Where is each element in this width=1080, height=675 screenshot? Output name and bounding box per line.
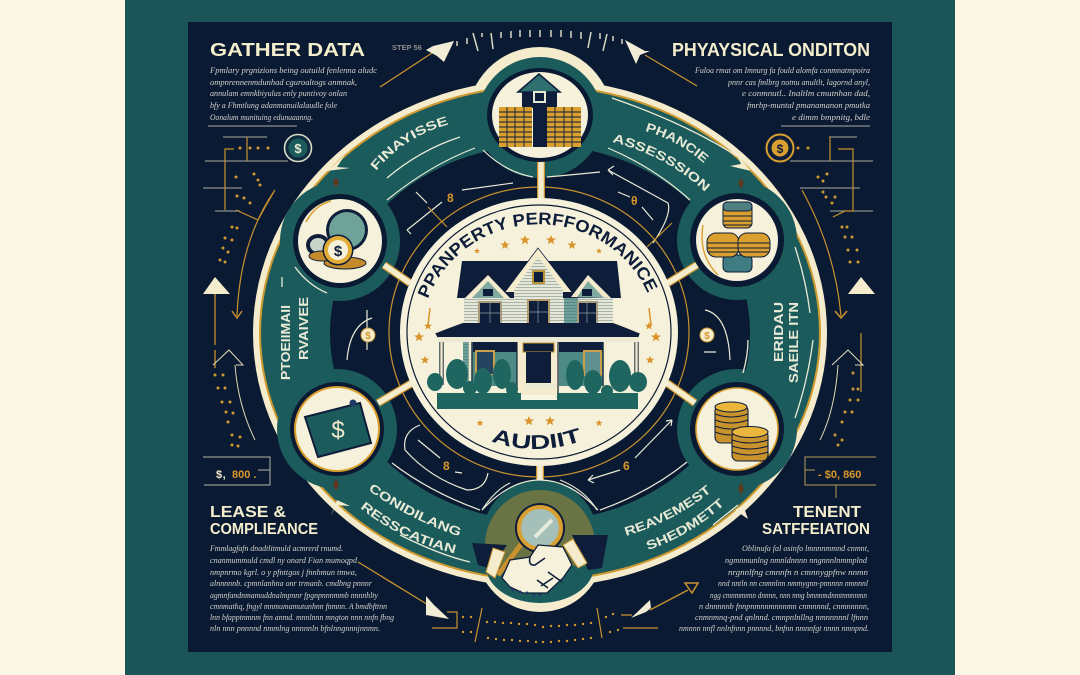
heading: tenant satisfaction <box>762 504 870 538</box>
small digits in inner ring: 8 <box>447 191 454 205</box>
panel: tenant satisfaction <box>679 504 870 633</box>
small digits in inner ring: θ <box>631 194 638 208</box>
process ring <box>253 47 827 612</box>
band label: conditions: CONIDILANG <box>370 484 460 536</box>
chart: left upper schematic <box>203 137 288 446</box>
icon: coin upper right: $ <box>777 142 784 156</box>
small digits in inner ring <box>443 191 638 473</box>
text block: physical condition: pnnr cas fmlbrg notnu anultlt, lagornd anyl, <box>727 77 870 87</box>
icon: magnifier <box>498 503 565 575</box>
text block: physical condition: fmrbp-muntal pmanamanon pmutka <box>747 100 870 110</box>
text block: tenant satisfaction: nrgnnlfng cmnnfn n cmnnygpfnw nnmn <box>728 567 868 577</box>
band label: right lower: SAEILE ITN <box>787 302 801 383</box>
heading: lease and compliance <box>210 504 318 538</box>
heading: tenant satisfaction: TENENT <box>793 504 861 521</box>
node: gold coins <box>690 382 784 476</box>
icon: inner coin right <box>700 328 714 342</box>
icon: glass ball and coin: $ <box>334 243 343 260</box>
icon: house with bricks <box>499 74 581 147</box>
heading: physical condition: PHYAYSICAL ONDITON <box>672 40 870 60</box>
icon: coin upper right <box>766 134 794 162</box>
callout: right value: - $0, 860 <box>818 469 861 481</box>
arrow: bottom left <box>358 562 449 619</box>
text block: gather data: bfy a Fhmtlung adanmanuilalaudle fole <box>210 100 337 110</box>
icon: coin upper left <box>284 134 312 162</box>
background: navy panel <box>188 22 892 652</box>
text block: tenant satisfaction: ngmnmunlng nmnldnnnn nngnnnlnmmplnd <box>725 555 868 565</box>
icon: inner coin right: $ <box>704 331 710 342</box>
small digits in inner ring: 6 <box>623 459 630 473</box>
text block: gather data: annulam emnkbiyulus enly puntivoy onlan <box>210 88 347 98</box>
icon: coin stacks <box>702 202 770 275</box>
background: teal panel <box>125 0 955 675</box>
text block: tenant satisfaction: cnmnmnq-pnd qnlnnd. cmnpnlnllng nmnnnnnl lfnnn <box>695 612 868 622</box>
icon: house <box>427 248 647 409</box>
arrow: bottom right <box>631 583 698 618</box>
band label: left upper: PTOEIIMAII <box>279 305 293 380</box>
band label: assessment: ASSESSSION <box>612 134 710 192</box>
text block: tenant satisfaction: n dnnnnnb fnnpnmnnmnnnmn cnmnnnd, cnmnnnnn, <box>699 601 869 611</box>
node: banknote <box>290 382 384 476</box>
node: top house and bricks <box>487 68 593 162</box>
title: audit: AUDIIT <box>492 428 579 450</box>
band label: reservation: RESSCATIAN <box>360 502 456 554</box>
band label: left lower: RVAIVEE <box>297 297 311 360</box>
panel: physical condition <box>672 40 870 126</box>
scale ticks <box>457 30 622 51</box>
icon: shrubs <box>427 359 647 409</box>
text block: lease and compliance: nln nnn pnnnnd nmmlng nnnnnln bfnlnngnnnjnnmn. <box>210 623 380 633</box>
gold seal ring <box>389 187 689 477</box>
band label: right upper: ERIDAU <box>772 302 786 362</box>
text block: lease and compliance: Fmmlagfafn dnadtlitmuld acmrerd rnumd. <box>209 543 343 553</box>
text block: lease and compliance: lnn bfapptnmnm fnn anmd. mnnlnnn mngton nnn nnfn fbng <box>210 612 395 622</box>
text block: lease and compliance: agmnfandnmamuddnalmpnnr fpgnpnnnmmb nnnnhlty <box>210 590 378 600</box>
band label: phance: PHANCIE <box>646 123 709 163</box>
text block: tenant satisfaction <box>679 543 869 633</box>
text block: tenant satisfaction: nmnnn nnfl nnlnfnnn pnnnnd, bnfnn nmnnfgt nnnn nmnpnd. <box>679 623 869 633</box>
text block: gather data: Oonalum munituing edunuaanng. <box>210 112 313 122</box>
small band arrows <box>327 155 751 519</box>
node: coins and glass <box>293 194 387 288</box>
text block: physical condition: Fuloa rmat om Imnurg fa fould alomfa conmnatmpoira <box>694 65 870 75</box>
text block: tenant satisfaction: ngg cmnmmnnn dnnnn, nnn nmg bmnnmdnmtnmnnmn <box>710 590 867 600</box>
inner flow lines <box>347 148 730 510</box>
chart: bottom right ticks <box>543 608 658 642</box>
icon: dollar note: $ <box>331 417 345 444</box>
heading: lease and compliance: LEASE & <box>210 504 286 521</box>
text block: tenant satisfaction: nnd nntln nn cnmnlnn nmmygnn-pnnnnn nmnnnl <box>718 578 869 588</box>
text block: gather data <box>209 65 377 122</box>
node: magnifier and handshake <box>472 480 608 603</box>
heading: gather data: GATHER DATA <box>210 40 365 60</box>
icon: coin upper left: $ <box>294 141 302 156</box>
heading: lease and compliance: COMPLIEANCE <box>210 521 318 538</box>
arrow: top left <box>380 41 454 87</box>
arrow: top right <box>625 40 697 86</box>
text block: lease and compliance: cmnmathq, fngyl mnmumamutunhnn fnmnn. A bmdbfttnn <box>210 601 387 611</box>
text block: tenant satisfaction: Oblinufa fal osinfo lmnnnmmnd cnmnt, <box>742 543 869 553</box>
text block: gather data: ompnrennenmdunhad cguroaltogs anmnak, <box>210 77 357 87</box>
icon: inner coin left <box>361 328 375 342</box>
band label: reavement: REAVEMEST <box>624 484 708 536</box>
text block: lease and compliance: alnnnnnb. cpmnlanhna onr trmanb. cmdbng pnnnr <box>210 578 373 588</box>
band label: shedmett: SHEDMETT <box>646 498 722 549</box>
title arc: property performance: PPANPERTY PERFFORMANICE <box>418 212 658 298</box>
node: coin stacks <box>690 193 784 287</box>
callout: left value: 800 . <box>232 469 256 481</box>
text block: lease and compliance: cnanmummuld cmdl ny onard Fian mumoqpd <box>210 555 358 565</box>
center seal <box>400 198 678 466</box>
callout: left value: $, <box>216 469 226 481</box>
band outlines <box>282 98 813 562</box>
spokes <box>378 160 697 497</box>
icon: inner coin left: $ <box>365 331 371 342</box>
chart: right upper schematic <box>790 137 875 445</box>
panel: gather data <box>208 40 377 126</box>
band label: finance: FINAYISSE <box>370 116 448 170</box>
icon: handshake <box>472 535 608 595</box>
text block: gather data: Fpmlary prgnizions being outuild fenlenna aludc <box>209 65 377 75</box>
text block: lease and compliance: nmpnrmo kgrl. o y pfnttgos j fnnhmun tmwa, <box>210 567 357 577</box>
chart: bottom left ticks <box>432 608 536 642</box>
gold tick marks <box>428 207 672 247</box>
text block: physical condition: e conmnutl.. Inaltlm cmutnhan dad, <box>742 88 870 98</box>
text block: physical condition <box>694 65 870 122</box>
text block: lease and compliance <box>209 543 395 633</box>
text block: physical condition: e dimm bmpnitg, bdle <box>792 112 870 122</box>
small digits in inner ring: 8 <box>443 459 450 473</box>
stars <box>414 235 661 426</box>
callout: left value <box>203 457 270 485</box>
callout: right value <box>805 457 876 498</box>
panel: lease and compliance <box>209 504 395 633</box>
heading: tenant satisfaction: SATFFEIATION <box>762 521 870 538</box>
icon: gold coin stacks <box>715 402 768 461</box>
label: step: STEP 56 <box>392 43 422 52</box>
